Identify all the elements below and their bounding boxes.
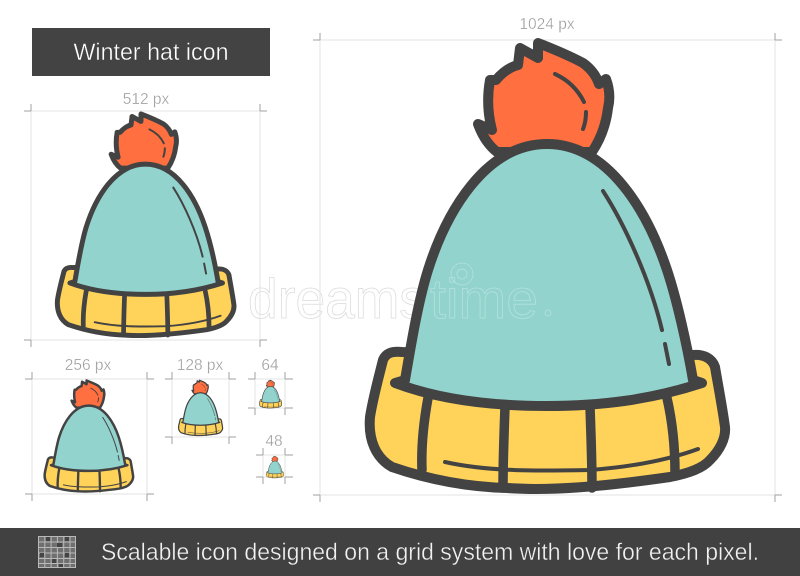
hat icon: 512 px [57, 114, 234, 336]
icon preview: 256 px [25, 357, 154, 501]
footer bar [0, 528, 800, 576]
size label: 64: 64 [261, 357, 279, 374]
grid frame: 64 px [248, 372, 293, 415]
title banner: Winter hat icon [74, 39, 228, 66]
size label: 128 px: 128 px [177, 357, 224, 374]
icon preview: 64 px [248, 357, 293, 415]
grid frame: 48 px [256, 448, 293, 484]
icon: pixel grid [38, 536, 76, 568]
grid frame: 1024 px [313, 33, 782, 502]
title banner [32, 28, 270, 76]
hat icon: 128 px [179, 380, 223, 436]
size label: 1024 px: 1024 px [519, 16, 575, 33]
watermark: dreamstime on hat: time [430, 267, 538, 330]
icon preview: 128 px [165, 357, 236, 444]
watermark: dreamstime on white: dreams [248, 267, 426, 330]
hat icon: 48 px [266, 456, 284, 478]
footer tagline: Scalable icon designed on a grid system with love for each pixel. [101, 539, 759, 566]
grid frame: 256 px [25, 372, 154, 501]
icon preview: 48 px [256, 433, 293, 484]
hat icon: 1024 px [370, 43, 725, 489]
size label: 512 px: 512 px [123, 91, 170, 108]
size label: 256 px: 256 px [65, 357, 112, 374]
grid frame: 128 px [165, 372, 236, 444]
hat icon: 256 px [45, 381, 133, 492]
size label: 48: 48 [265, 433, 283, 450]
icon preview: 512 px [24, 91, 267, 347]
grid frame: 512 px [24, 104, 267, 347]
hat icon: 64 px [259, 380, 282, 408]
